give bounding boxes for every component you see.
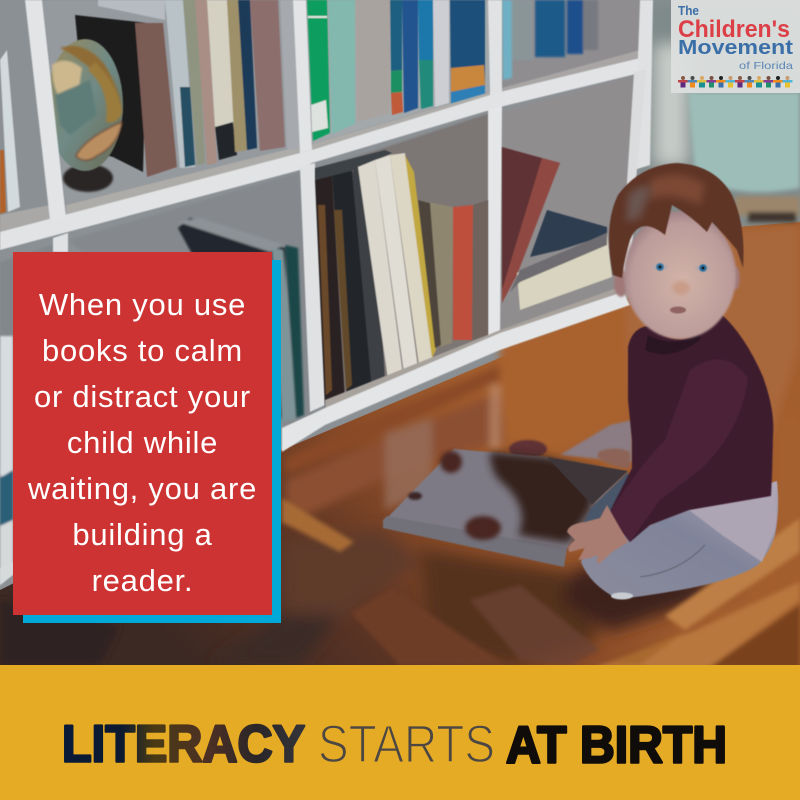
callout text: child while: [67, 425, 218, 460]
slogan: Literacy Starts at Birth: LITERACY: [62, 716, 305, 774]
baby: [567, 163, 778, 600]
logo wordmark: of Florida: [739, 60, 793, 72]
far foot and leg: [509, 420, 632, 462]
callout text: building a: [72, 517, 213, 552]
baby pants: [581, 481, 778, 600]
logo wordmark: The: [678, 3, 699, 18]
room behind the shelf: [640, 0, 800, 230]
baby hair: [609, 163, 744, 278]
callout text: When you use: [39, 287, 246, 322]
slogan: Literacy Starts at Birth: AT BIRTH: [506, 716, 727, 774]
near hand: [567, 505, 628, 563]
callout text: or distract your: [34, 379, 251, 414]
callout: red message card: [13, 252, 272, 615]
books: lower shelf left: [0, 218, 304, 585]
logo row of paper-doll children: [678, 76, 792, 88]
baby nose: [672, 281, 690, 295]
logo wordmark: [678, 3, 793, 72]
footer banner: [0, 665, 800, 800]
lower shelf board: [0, 285, 630, 585]
baby eyes: [652, 264, 668, 270]
baby mouth: [670, 306, 686, 314]
slogan: Literacy Starts at Birth: STARTS: [318, 715, 495, 774]
floor: [0, 222, 800, 668]
bookshelf frame: [0, 0, 653, 412]
logo wordmark: Children's: [678, 16, 790, 43]
bookshelf back panels: [0, 0, 640, 425]
far hand: [598, 448, 630, 468]
callout text: waiting, you are: [28, 471, 257, 506]
baby sweater: [608, 313, 773, 542]
callout offset shadow: [23, 260, 281, 623]
books: lower shelf centre: [315, 150, 488, 408]
teal basket: [688, 92, 800, 222]
callout text: books to calm: [42, 333, 243, 368]
logo wordmark: Movement: [678, 36, 793, 59]
baby head: [609, 163, 744, 339]
books: top shelf left: [0, 0, 285, 214]
open book on the floor: [383, 449, 632, 567]
callout text: [28, 287, 257, 598]
books: top shelf right: [502, 0, 598, 80]
slogan: Literacy Starts at Birth: [62, 715, 727, 774]
books: lower shelf right: [502, 147, 612, 310]
callout text: reader.: [92, 563, 193, 598]
globe: [47, 39, 123, 192]
books: top shelf centre: [307, 0, 485, 141]
logo panel: [671, 0, 800, 93]
